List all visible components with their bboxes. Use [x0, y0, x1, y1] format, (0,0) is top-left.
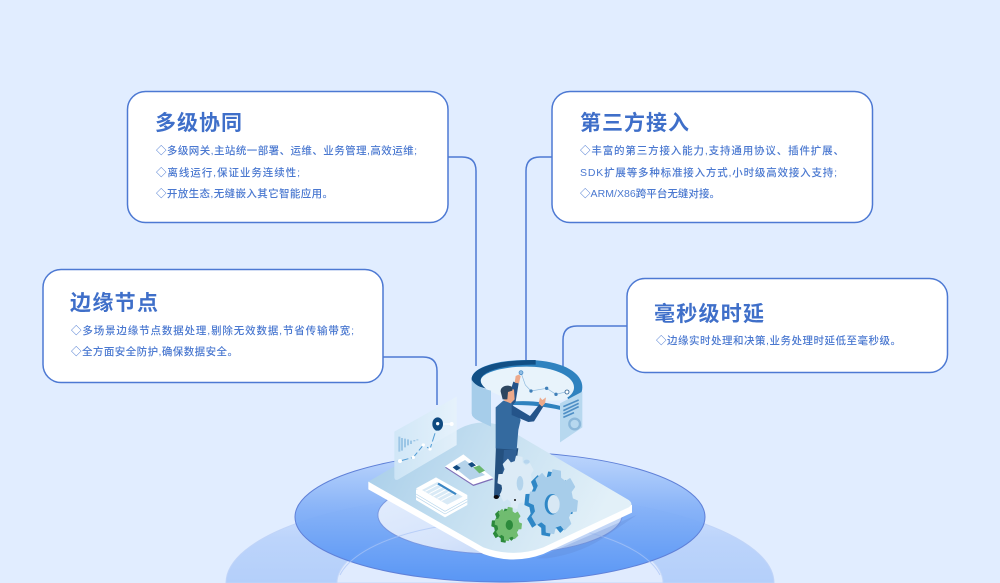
- isometric illustration: [368, 360, 637, 559]
- icon: tablet: [445, 454, 493, 486]
- panel: 毫秒级时延: [627, 278, 948, 372]
- text block: ◇ARM/X86跨平台无缝对接。: [580, 187, 720, 200]
- icon: chart panel: [394, 397, 457, 480]
- large blue ring: [295, 452, 705, 582]
- panel: 边缘节点: [43, 270, 383, 382]
- text block: [71, 324, 354, 358]
- icon: paper stack: [416, 477, 467, 517]
- panel: 多级协同: [128, 92, 448, 222]
- panel: 第三方接入: [552, 92, 872, 222]
- shoe: [494, 495, 499, 499]
- connector: third-party access: [526, 157, 552, 362]
- icon: green gear: [490, 505, 523, 544]
- screen lower band: [512, 401, 561, 410]
- heading: 第三方接入: [580, 111, 689, 135]
- extended arm: [512, 404, 543, 422]
- ring hole shading: [378, 476, 622, 554]
- text block: ◇多场景边缘节点数据处理,剔除无效数据,节省传输带宽;: [71, 324, 354, 337]
- overlapping arcs: [340, 522, 660, 575]
- heading: 毫秒级时延: [654, 303, 764, 326]
- icon: light gear: [496, 453, 537, 511]
- text block: [156, 144, 417, 200]
- left panel: [472, 379, 491, 427]
- text block: ◇开放生态,无缝嵌入其它智能应用。: [156, 187, 333, 200]
- connector: millisecond latency: [563, 326, 627, 375]
- raised arm: [507, 382, 519, 408]
- side panel: [560, 392, 582, 442]
- figure: man in suit: [494, 375, 546, 499]
- heading: 多级协同: [155, 112, 242, 135]
- text block: ◇全方面安全防护,确保数据安全。: [71, 345, 238, 358]
- hands: [539, 397, 546, 407]
- icon: curved screen: [472, 360, 582, 442]
- torso: [496, 401, 521, 450]
- screen surface: [481, 367, 574, 402]
- lower outer ring: [226, 494, 774, 583]
- text block: SDK扩展等多种标准接入方式,小时级高效接入支持;: [580, 166, 837, 179]
- text block: ◇丰富的第三方接入能力,支持通用协议、插件扩展、: [580, 144, 844, 157]
- text block: ◇边缘实时处理和决策,业务处理时延低至毫秒级。: [656, 334, 901, 347]
- ring back band: [472, 360, 582, 403]
- platform: [368, 422, 632, 559]
- lower inner ring: [337, 521, 663, 583]
- connector: edge node: [383, 357, 437, 405]
- connector: multi-level collaboration: [448, 157, 476, 366]
- platform shadow: [537, 515, 637, 558]
- head: [504, 389, 515, 403]
- heading: 边缘节点: [70, 292, 158, 315]
- text block: ◇多级网关,主站统一部署、运维、业务管理,高效运维;: [156, 144, 417, 157]
- concentric base rings: [226, 452, 774, 583]
- dark top band: [472, 360, 536, 389]
- text block: [580, 144, 844, 200]
- chart line: [521, 373, 567, 394]
- text block: ◇离线运行,保证业务连续性;: [156, 166, 300, 179]
- legs: [494, 445, 518, 497]
- icon: blue gear: [522, 466, 580, 539]
